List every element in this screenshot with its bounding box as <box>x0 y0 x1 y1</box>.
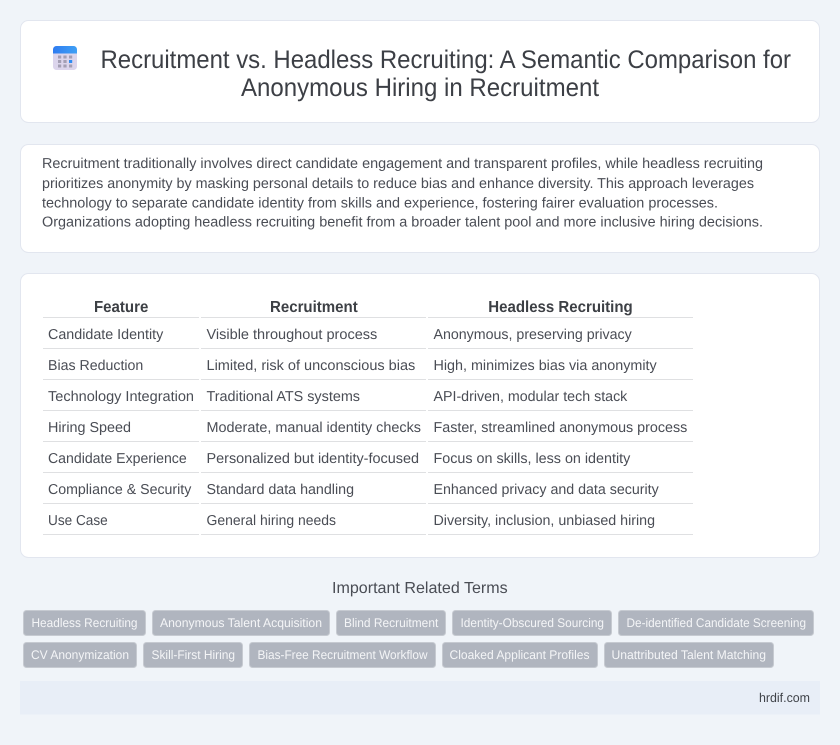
tag: Unattributed Talent Matching: Unattributed Talent Matching <box>612 648 766 662</box>
panel: summary paragraph <box>20 144 820 252</box>
text block: summary <box>42 156 763 230</box>
table row: Compliance & Security: Enhanced privacy and data security <box>434 482 659 498</box>
table row: Bias Reduction: High, minimizes bias via anonymity <box>434 358 657 374</box>
table row: Technology Integration: Technology Integration <box>48 389 194 405</box>
tag: Identity-Obscured Sourcing: Identity-Obscured Sourcing <box>460 616 604 630</box>
text block: summary: Recruitment traditionally involves direct candidate engagement and transparent profiles, while headless recruiting <box>42 156 763 172</box>
tag: Headless Recruiting <box>24 610 146 636</box>
table row: Hiring Speed: Faster, streamlined anonymous process <box>434 420 687 436</box>
tag: Skill-First Hiring: Skill-First Hiring <box>152 648 235 662</box>
panel: title card <box>20 20 820 122</box>
table row: Use Case: Diversity, inclusion, unbiased hiring <box>434 513 655 529</box>
icon: calendar <box>53 46 77 70</box>
table row: Bias Reduction: Bias Reduction <box>48 358 143 374</box>
table header: Feature <box>94 299 148 316</box>
table row: Use Case <box>43 513 693 535</box>
title <box>100 46 791 102</box>
title: Recruitment vs. Headless Recruiting: A Semantic Comparison for <box>100 46 791 74</box>
table row: Bias Reduction: Limited, risk of unconscious bias <box>206 358 415 374</box>
footer bar <box>20 681 820 714</box>
tag: Headless Recruiting: Headless Recruiting <box>32 616 138 630</box>
tag: Blind Recruitment: Blind Recruitment <box>344 616 439 630</box>
tag: Blind Recruitment <box>336 610 446 636</box>
table row: Candidate Experience <box>43 451 693 473</box>
panel: related term tags <box>24 610 814 668</box>
table row: Technology Integration <box>43 389 693 411</box>
table row: Bias Reduction <box>43 358 693 380</box>
table row: Candidate Identity: Candidate Identity <box>48 327 164 343</box>
table row: Hiring Speed <box>43 420 693 442</box>
tag: CV Anonymization: CV Anonymization <box>31 648 129 662</box>
tag: Anonymous Talent Acquisition <box>152 610 330 636</box>
table header <box>43 299 693 318</box>
panel: comparison table <box>20 274 820 558</box>
table row: Candidate Identity: Anonymous, preserving privacy <box>434 327 632 343</box>
tag: Identity-Obscured Sourcing <box>452 610 612 636</box>
table header: Headless Recruiting <box>488 299 633 316</box>
tag: CV Anonymization <box>24 642 136 668</box>
tag: Bias-Free Recruitment Workflow <box>250 642 436 668</box>
tag: Anonymous Talent Acquisition: Anonymous Talent Acquisition <box>160 616 322 630</box>
table row: Candidate Experience: Focus on skills, less on identity <box>434 451 631 467</box>
table row: Candidate Experience: Candidate Experience <box>48 451 187 467</box>
text block: summary: technology to separate candidate identity from skills and experience, fostering fairer evaluation processes. <box>42 196 718 212</box>
heading: Important Related Terms: Important Related Terms <box>332 580 508 597</box>
table header: Recruitment <box>270 299 358 316</box>
table row: Compliance & Security: Standard data handling <box>206 482 354 498</box>
table row: Compliance & Security: Compliance & Security <box>48 482 192 498</box>
table row: Candidate Identity <box>43 327 693 349</box>
tag: Unattributed Talent Matching <box>604 642 774 668</box>
footer bar: hrdif.com <box>759 690 810 705</box>
text block: summary: prioritizes anonymity by masking personal details to reduce bias and enhance diversity. This approach leverages <box>42 176 754 192</box>
table row: Hiring Speed: Hiring Speed <box>48 420 131 436</box>
tag: Cloaked Applicant Profiles: Cloaked Applicant Profiles <box>450 648 590 662</box>
text block: summary: Organizations adopting headless recruiting benefit from a broader talent pool and more inclusive hiring decisions. <box>42 214 763 230</box>
tag: Bias-Free Recruitment Workflow: Bias-Free Recruitment Workflow <box>258 648 428 662</box>
table row: Technology Integration: Traditional ATS systems <box>206 389 360 405</box>
table row: Candidate Identity: Visible throughout process <box>206 327 377 343</box>
table row: Use Case: Use Case <box>48 513 108 529</box>
table row: Technology Integration: API-driven, modular tech stack <box>434 389 628 405</box>
table row: Candidate Experience: Personalized but identity-focused <box>206 451 419 467</box>
tag: Skill-First Hiring <box>144 642 242 668</box>
title: Anonymous Hiring in Recruitment <box>241 74 599 102</box>
tag: De-identified Candidate Screening <box>618 610 814 636</box>
tag: Cloaked Applicant Profiles <box>442 642 598 668</box>
table row: Compliance & Security <box>43 482 693 504</box>
tag: De-identified Candidate Screening: De-identified Candidate Screening <box>626 616 806 630</box>
table row: Hiring Speed: Moderate, manual identity checks <box>206 420 421 436</box>
table row: Use Case: General hiring needs <box>206 513 336 529</box>
